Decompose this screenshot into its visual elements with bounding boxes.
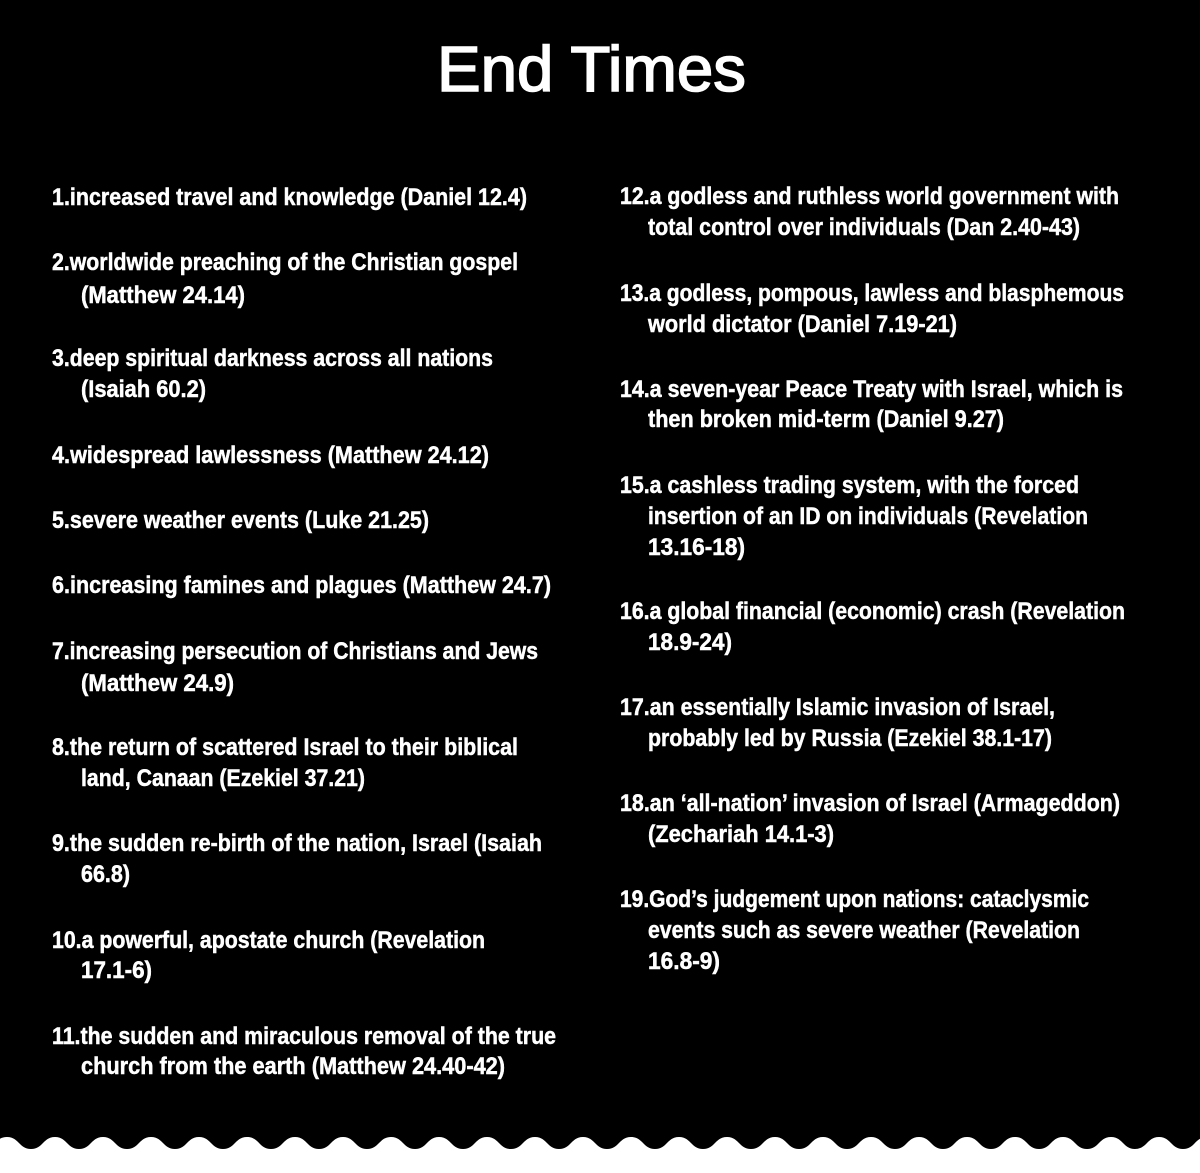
item 13 [620, 280, 1124, 338]
item 17 [620, 694, 1055, 752]
item 15: 13.16-18) [648, 534, 745, 561]
item 8: 8.the return of scattered Israel to their biblical [52, 734, 518, 761]
item 2: (Matthew 24.14) [81, 282, 245, 309]
item 9: 66.8) [81, 861, 130, 888]
item 15: 15.a cashless trading system, with the forced [620, 472, 1079, 499]
item 2: 2.worldwide preaching of the Christian gospel [52, 249, 518, 276]
item 16 [620, 598, 1125, 656]
item 8: land, Canaan (Ezekiel 37.21) [81, 765, 365, 792]
item 3 [52, 345, 493, 403]
item 18 [620, 790, 1120, 848]
item 15 [620, 472, 1088, 561]
item 4: 4.widespread lawlessness (Matthew 24.12) [52, 442, 489, 469]
item 12: total control over individuals (Dan 2.40-43) [648, 214, 1080, 241]
item 10: 17.1-6) [81, 957, 152, 984]
item 16: 16.a global financial (economic) crash (Revelation [620, 598, 1125, 625]
item 8 [52, 734, 518, 792]
item 1: 1.increased travel and knowledge (Daniel 12.4) [52, 184, 527, 211]
item 13: world dictator (Daniel 7.19-21) [647, 311, 957, 338]
title: End Times [437, 33, 746, 105]
item 6: 6.increasing famines and plagues (Matthew 24.7) [52, 572, 551, 599]
item 17: probably led by Russia (Ezekiel 38.1-17) [648, 725, 1052, 752]
item 3: (Isaiah 60.2) [81, 376, 206, 403]
item 12: 12.a godless and ruthless world government with [620, 183, 1119, 210]
list: left column [52, 184, 556, 1080]
item 3: 3.deep spiritual darkness across all nations [52, 345, 493, 372]
item 11: 11.the sudden and miraculous removal of the true [52, 1023, 556, 1050]
item 13: 13.a godless, pompous, lawless and blasphemous [620, 280, 1124, 307]
item 14: then broken mid-term (Daniel 9.27) [648, 406, 1004, 433]
item 5: 5.severe weather events (Luke 21.25) [52, 507, 429, 534]
item 19: 19.God’s judgement upon nations: cataclysmic [620, 886, 1089, 913]
item 19: events such as severe weather (Revelation [648, 917, 1080, 944]
item 17: 17.an essentially Islamic invasion of Israel, [620, 694, 1055, 721]
item 14 [620, 376, 1123, 433]
list: right column [620, 183, 1125, 975]
wavy bottom edge [0, 1137, 1200, 1173]
item 12 [620, 183, 1119, 241]
item 19: 16.8-9) [648, 948, 720, 975]
item 9 [52, 830, 542, 888]
item 2 [52, 249, 518, 309]
item 7: 7.increasing persecution of Christians and Jews [52, 638, 538, 665]
item 9: 9.the sudden re-birth of the nation, Israel (Isaiah [52, 830, 542, 857]
item 18: 18.an ‘all-nation’ invasion of Israel (Armageddon) [620, 790, 1120, 817]
item 11: church from the earth (Matthew 24.40-42) [81, 1053, 505, 1080]
item 11 [52, 1023, 556, 1080]
item 7: (Matthew 24.9) [81, 670, 234, 697]
item 16: 18.9-24) [648, 629, 732, 656]
item 7 [52, 638, 538, 697]
item 10 [52, 927, 485, 984]
item 10: 10.a powerful, apostate church (Revelation [52, 927, 485, 954]
item 15: insertion of an ID on individuals (Revelation [648, 503, 1088, 530]
item 19 [620, 886, 1089, 975]
item 14: 14.a seven-year Peace Treaty with Israel, which is [620, 376, 1123, 403]
item 18: (Zechariah 14.1-3) [648, 821, 834, 848]
